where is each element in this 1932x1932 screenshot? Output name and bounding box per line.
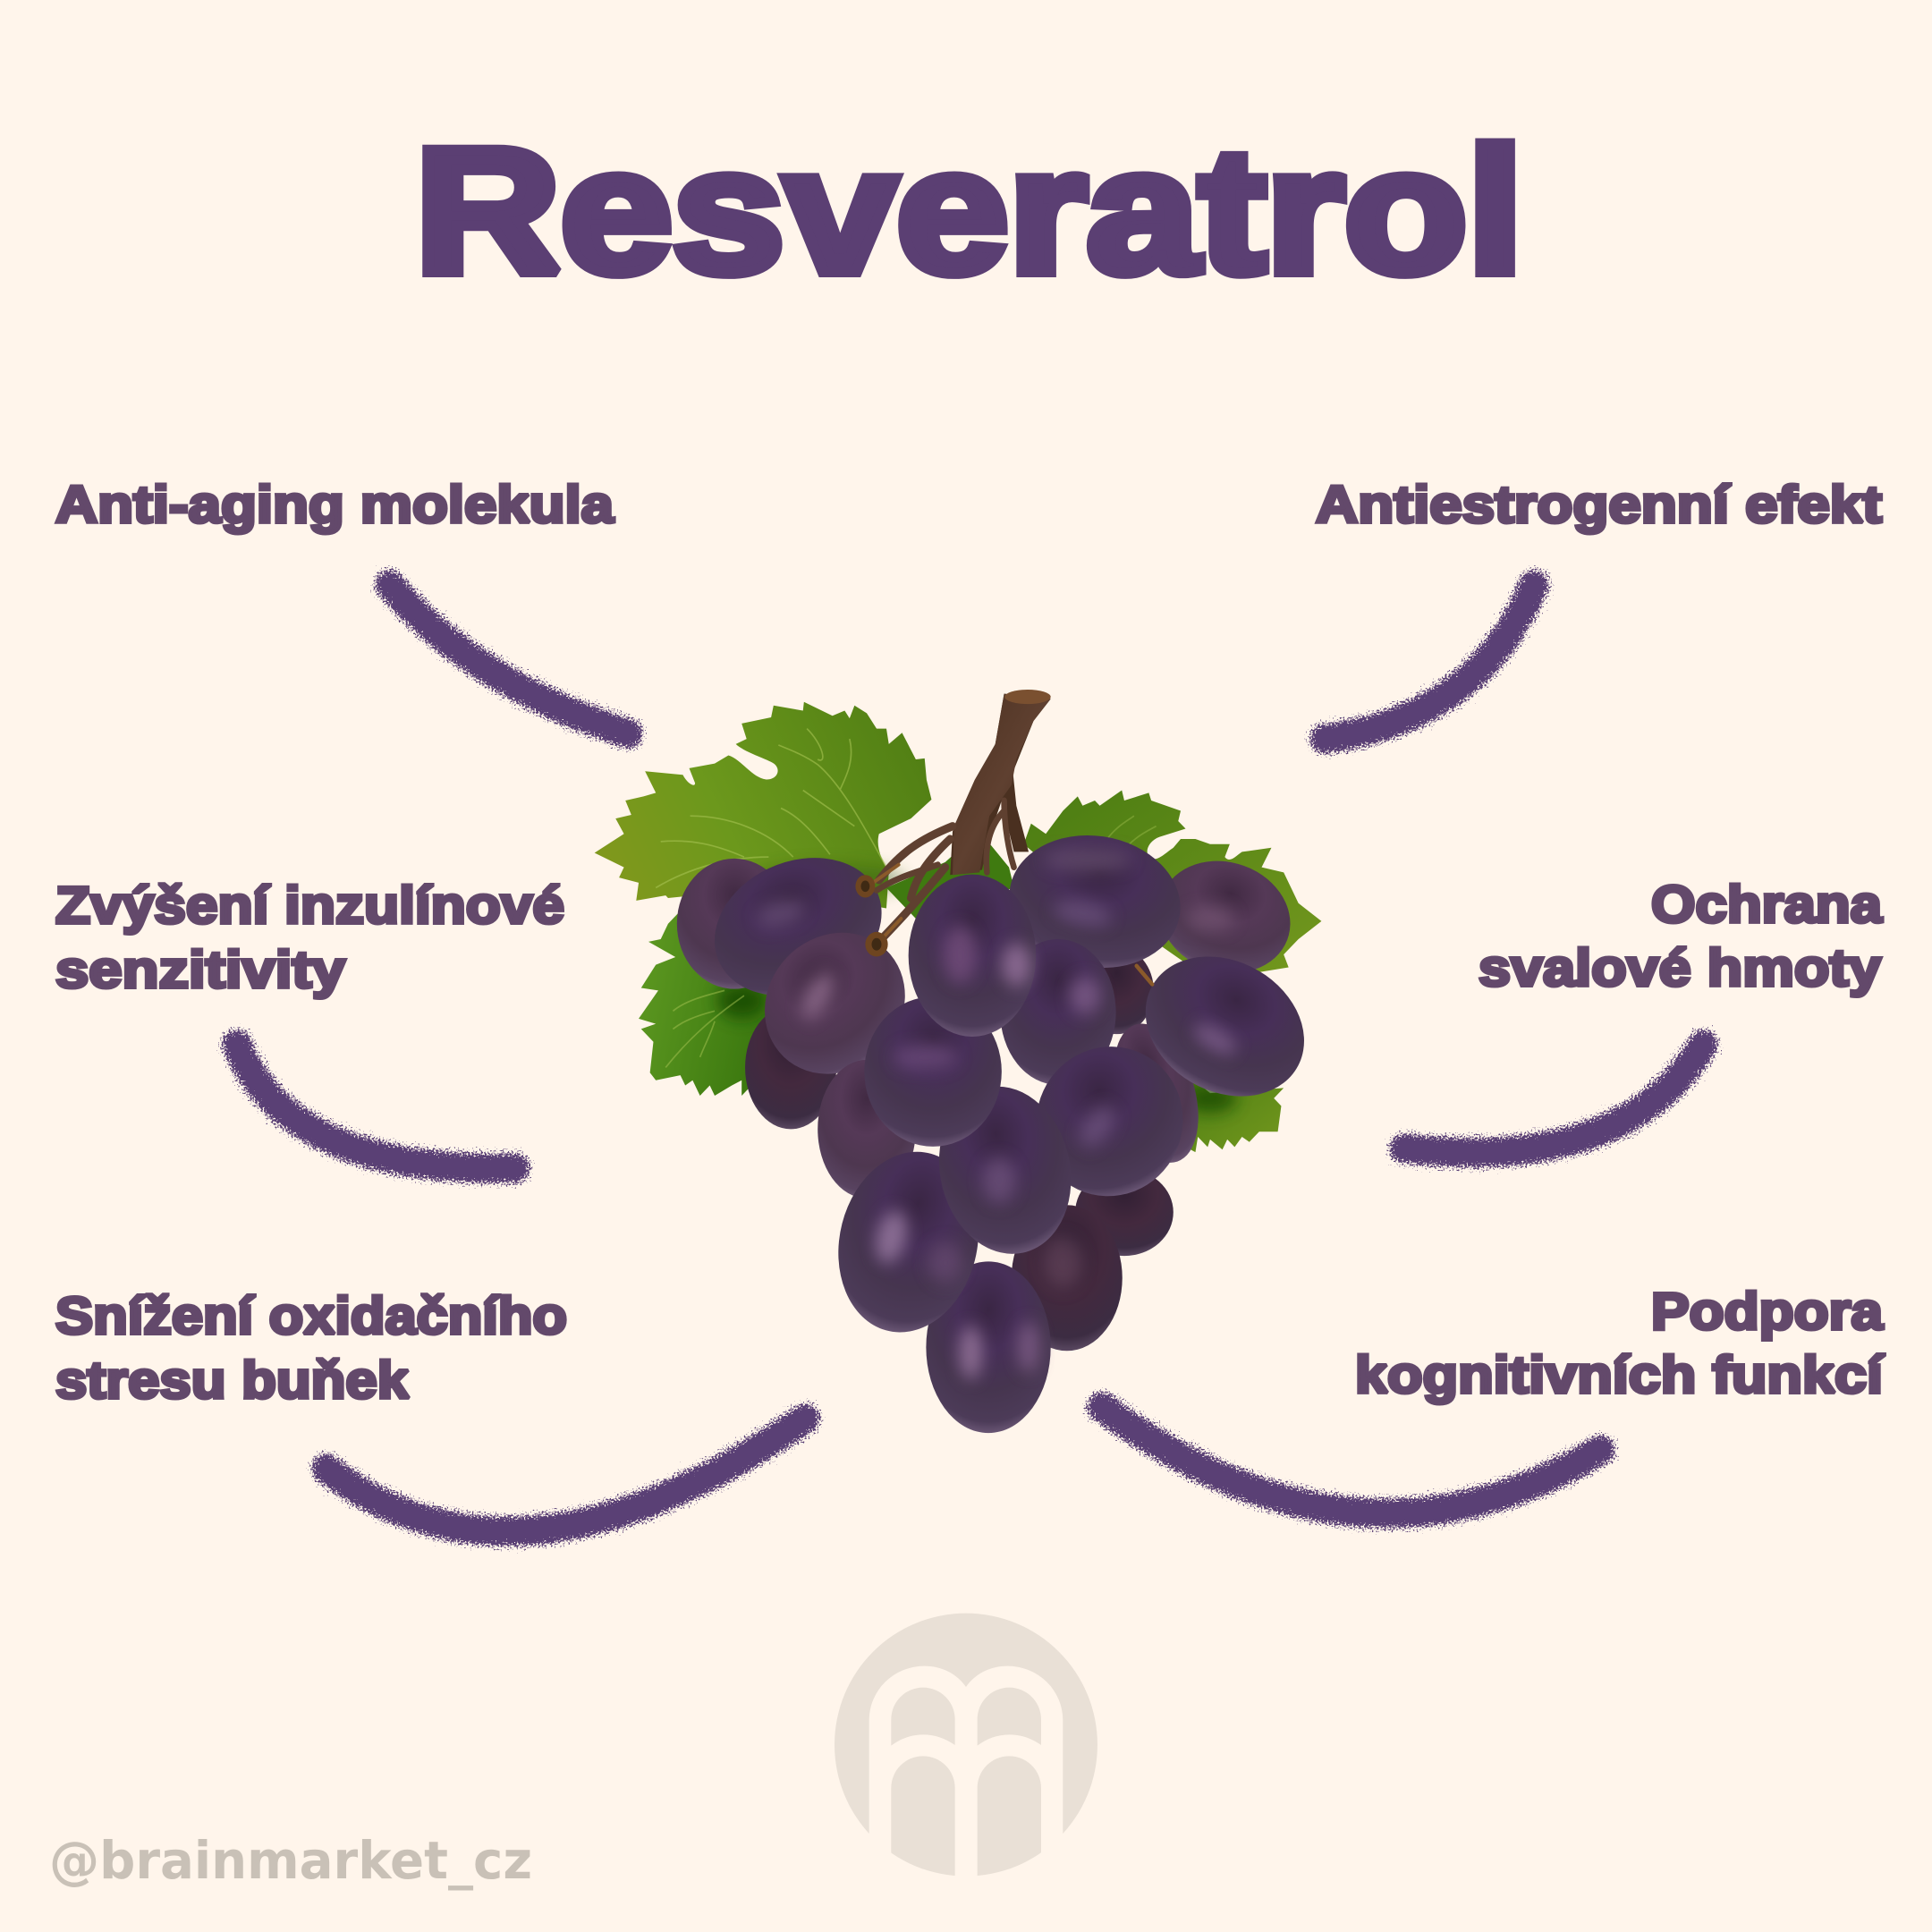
label: antiestrogen effect: Antiestrogenní efekt [1316, 476, 1882, 534]
label: cognitive support line 2: kognitivních funkcí [1355, 1346, 1885, 1404]
label: oxidative stress line 2: stresu buňek [55, 1352, 410, 1410]
arrow stroke: insulin [237, 1045, 515, 1168]
arrow stroke: anti-aging [390, 585, 628, 733]
label: insulin sensitivity line 2: senzitivity [55, 941, 345, 999]
logo [835, 1614, 1097, 1885]
arrow stroke: oxidative stress [326, 1419, 805, 1531]
label: anti-aging: Anti-aging molekula [55, 476, 614, 534]
leaf: lower right [1171, 1072, 1284, 1152]
green behind stem [886, 831, 1014, 919]
stem [855, 690, 1152, 984]
illustration: grape bunch [595, 690, 1326, 1433]
leaf: large upper left [595, 702, 931, 909]
label: oxidative stress line 1: Snížení oxidačního [55, 1287, 567, 1345]
label: muscle protection line 1: Ochrana [1651, 876, 1883, 934]
arrow stroke: muscle [1404, 1045, 1703, 1153]
arrow stroke: antiestrogen [1325, 585, 1534, 739]
handle text: @brainmarket_cz [49, 1830, 532, 1891]
leaf: lower left [639, 913, 768, 1096]
label: muscle protection line 2: svalové hmoty [1479, 939, 1881, 997]
arrow stroke: cognitive [1102, 1407, 1600, 1513]
title: Resveratrol [415, 112, 1523, 309]
grapes [677, 824, 1326, 1433]
label: cognitive support line 1: Podpora [1651, 1283, 1884, 1341]
label: insulin sensitivity line 1: Zvýšení inzulínové [55, 877, 564, 935]
leaf: upper right [1024, 791, 1321, 980]
